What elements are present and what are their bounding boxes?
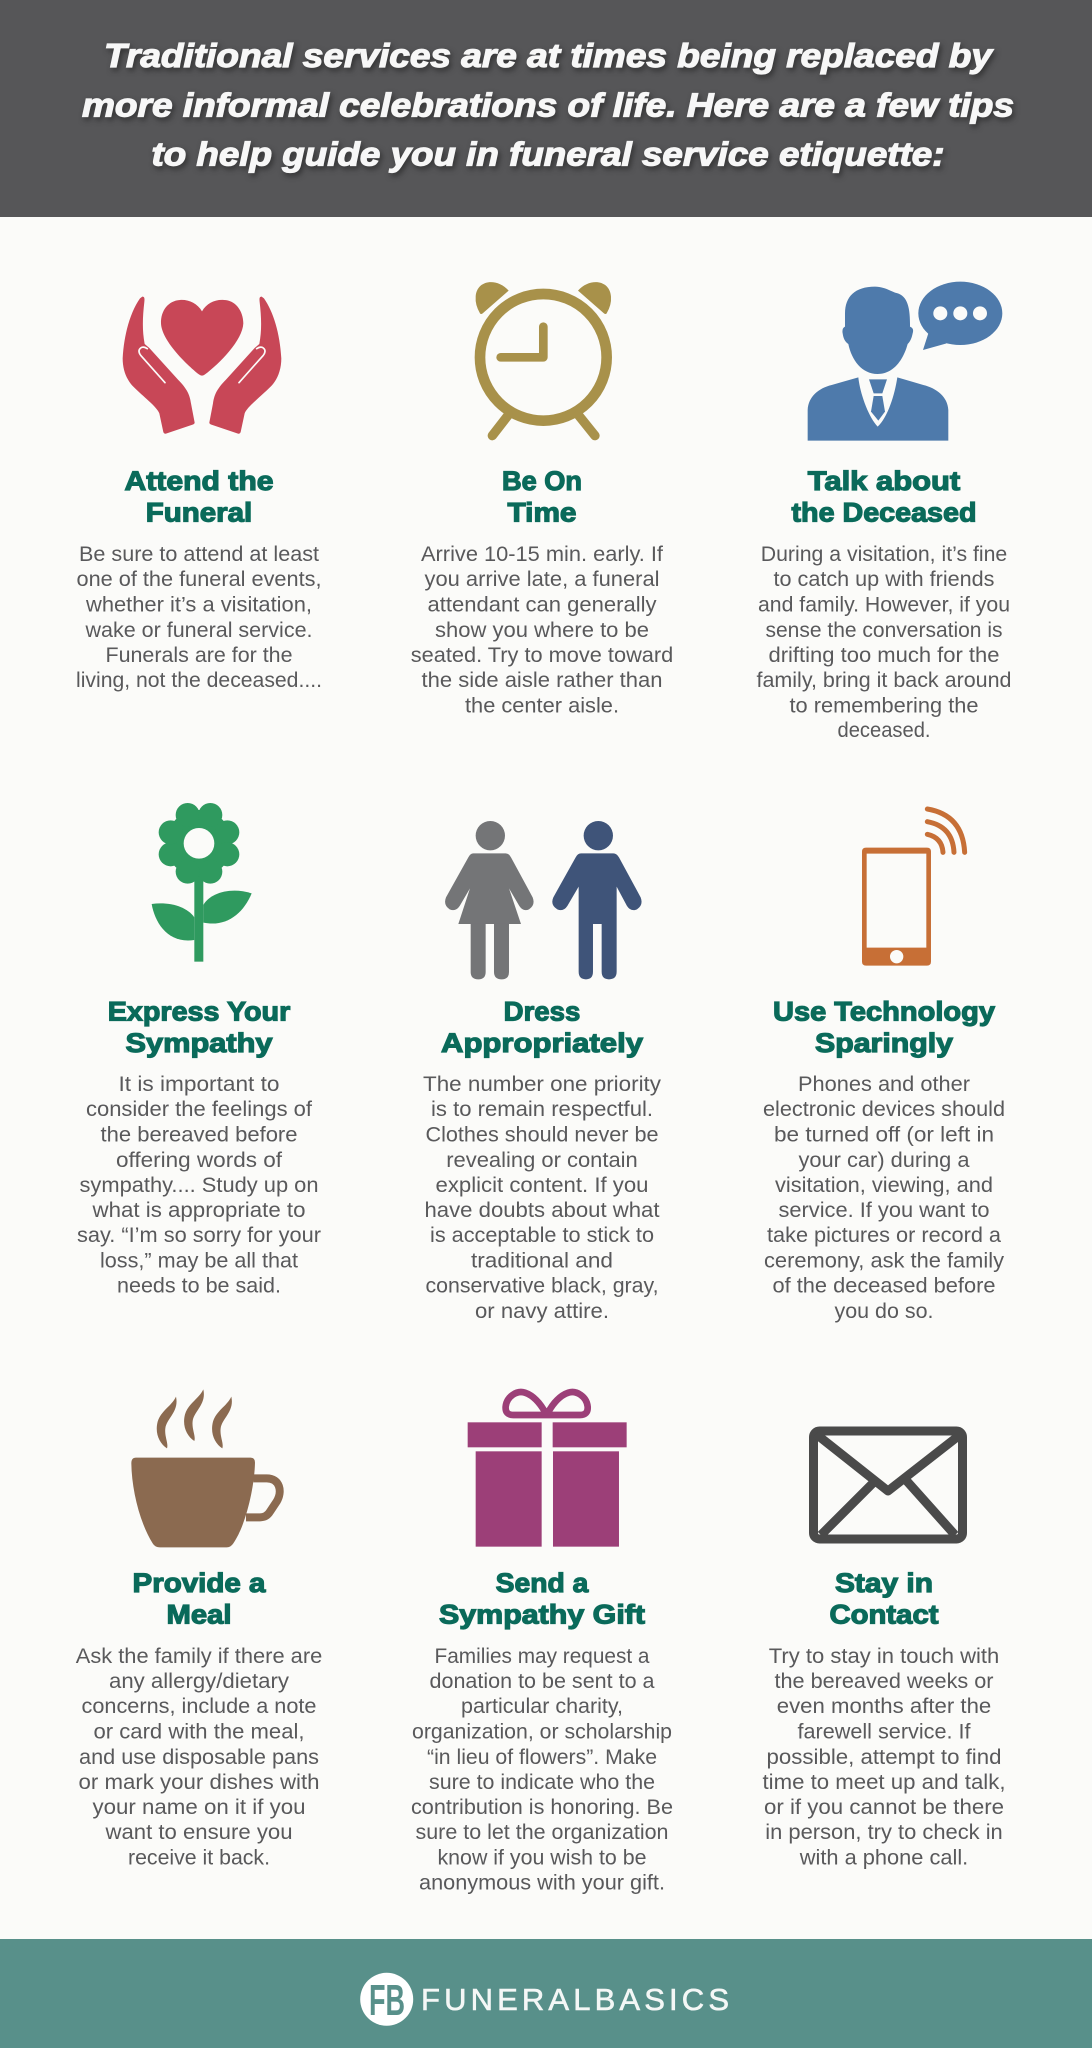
text: dress appropriately: Clothes should never be <box>426 1122 658 1146</box>
text: attend the funeral: wake or funeral service. <box>85 618 312 642</box>
text: express your sympathy: loss,” may be all that <box>100 1248 298 1272</box>
title <box>82 37 1014 172</box>
text: dress appropriately <box>423 1072 661 1323</box>
text: express your sympathy: what is appropriate to <box>91 1198 306 1222</box>
heading: provide a meal: Provide a <box>132 1568 267 1598</box>
text: talk about the deceased: During a visitation, it’s fine <box>761 542 1007 566</box>
text: express your sympathy: needs to be said. <box>117 1274 281 1298</box>
panel: use technology sparingly <box>763 809 1005 1323</box>
heading: dress appropriately: Appropriately <box>441 1028 643 1058</box>
text: use technology sparingly: take pictures or record a <box>767 1223 1001 1247</box>
text: attend the funeral: living, not the deceased.... <box>76 668 322 692</box>
text: stay in contact: or if you cannot be there <box>764 1795 1004 1819</box>
text: express your sympathy: the bereaved before <box>100 1122 298 1146</box>
icon: gift box <box>468 1392 627 1547</box>
text: express your sympathy: consider the feelings of <box>86 1097 312 1121</box>
panel: attend the funeral <box>76 297 322 692</box>
text: be on time: Arrive 10-15 min. early. If <box>421 542 663 566</box>
text: send a sympathy gift: “in lieu of flowers”. Make <box>427 1745 657 1769</box>
text: attend the funeral: one of the funeral events, <box>76 567 322 591</box>
panel: stay in contact <box>762 1431 1006 1870</box>
text: express your sympathy: It is important to <box>118 1072 280 1096</box>
text: be on time: seated. Try to move toward <box>411 643 673 667</box>
text: provide a meal: your name on it if you <box>92 1795 306 1819</box>
text: express your sympathy: sympathy.... Study up on <box>80 1173 318 1197</box>
heading: talk about the deceased: Talk about <box>808 466 960 496</box>
text: use technology sparingly: service. If you want to <box>778 1198 990 1222</box>
heading: attend the funeral: Funeral <box>146 498 252 528</box>
heading: attend the funeral <box>124 466 274 528</box>
text: send a sympathy gift: organization, or scholarship <box>412 1720 672 1744</box>
heading: talk about the deceased <box>792 466 976 528</box>
text: talk about the deceased: and family. However, if you <box>758 592 1010 616</box>
text: be on time: show you where to be <box>435 618 649 642</box>
text: provide a meal: Ask the family if there are <box>76 1644 322 1668</box>
icon: woman and man figures <box>445 821 642 979</box>
heading: express your sympathy <box>108 996 291 1058</box>
text: be on time: the center aisle. <box>465 694 619 718</box>
panel: provide a meal <box>76 1389 322 1870</box>
text: send a sympathy gift: particular charity, <box>461 1694 623 1718</box>
text: dress appropriately: have doubts about what <box>424 1198 660 1222</box>
panel: be on time <box>411 282 673 718</box>
heading: be on time: Be On <box>502 466 582 496</box>
text: talk about the deceased: to remembering the <box>790 694 978 718</box>
text: provide a meal: or card with the meal, <box>94 1720 304 1744</box>
text: send a sympathy gift: contribution is honoring. Be <box>411 1795 673 1819</box>
text: use technology sparingly: you do so. <box>834 1299 934 1323</box>
heading: express your sympathy: Express Your <box>108 996 291 1026</box>
text: send a sympathy gift: Families may request a <box>434 1644 650 1668</box>
header banner <box>0 0 1092 217</box>
text: talk about the deceased: sense the conversation is <box>766 618 1002 642</box>
heading: stay in contact: Contact <box>830 1600 939 1630</box>
heading: use technology sparingly: Use Technology <box>773 996 995 1026</box>
text: send a sympathy gift: anonymous with your gift. <box>419 1870 665 1894</box>
text: dress appropriately: or navy attire. <box>475 1299 609 1323</box>
text: dress appropriately: explicit content. If you <box>436 1173 648 1197</box>
text: dress appropriately: revealing or contain <box>446 1148 638 1172</box>
text: attend the funeral: Funerals are for the <box>106 643 292 667</box>
heading: stay in contact: Stay in <box>835 1568 933 1598</box>
text: dress appropriately: is to remain respectful. <box>431 1097 653 1121</box>
text: stay in contact: possible, attempt to find <box>766 1745 1002 1769</box>
text: dress appropriately: traditional and <box>471 1248 613 1272</box>
text: talk about the deceased: to catch up with friends <box>774 567 994 591</box>
title: Traditional services are at times being replaced by <box>104 37 994 74</box>
text: talk about the deceased: drifting too much for the <box>768 643 1000 667</box>
text: dress appropriately: The number one priority <box>423 1072 661 1096</box>
text: send a sympathy gift: sure to indicate who the <box>429 1770 655 1794</box>
heading: talk about the deceased: the Deceased <box>792 498 976 528</box>
text: stay in contact: even months after the <box>777 1694 991 1718</box>
text: provide a meal: receive it back. <box>128 1846 270 1870</box>
text: express your sympathy: say. “I’m so sorry for your <box>77 1223 321 1247</box>
panel: express your sympathy <box>77 803 321 1298</box>
text: talk about the deceased: family, bring it back around <box>756 668 1012 692</box>
text: send a sympathy gift: sure to let the organization <box>416 1820 668 1844</box>
text: be on time: attendant can generally <box>428 592 657 616</box>
text: be on time <box>411 542 673 718</box>
icon: man with speech bubble <box>808 282 1002 441</box>
heading: dress appropriately: Dress <box>504 996 580 1026</box>
text: stay in contact: time to meet up and talk, <box>762 1770 1006 1794</box>
icon: alarm clock <box>476 282 611 436</box>
panel: dress appropriately <box>423 821 661 1323</box>
heading: provide a meal <box>132 1568 267 1630</box>
heading: use technology sparingly <box>773 996 995 1058</box>
heading: be on time <box>502 466 582 528</box>
text: dress appropriately: conservative black, gray, <box>426 1274 658 1298</box>
icon: smartphone with signal <box>862 809 965 966</box>
text: stay in contact: farewell service. If <box>798 1720 971 1744</box>
heading: be on time: Time <box>508 498 576 528</box>
text: stay in contact: in person, try to check in <box>765 1820 1003 1844</box>
text: talk about the deceased <box>756 542 1012 742</box>
icon: coffee cup <box>131 1389 280 1547</box>
text: stay in contact: the bereaved weeks or <box>774 1669 994 1693</box>
text: send a sympathy gift: donation to be sent to a <box>430 1669 655 1693</box>
text: talk about the deceased: deceased. <box>838 718 930 742</box>
text: stay in contact: Try to stay in touch with <box>769 1644 999 1668</box>
text: attend the funeral: whether it’s a visitation, <box>85 592 312 616</box>
text: be on time: the side aisle rather than <box>422 668 662 692</box>
heading: provide a meal: Meal <box>166 1600 232 1630</box>
text: provide a meal: or mark your dishes with <box>78 1770 320 1794</box>
heading: dress appropriately <box>441 996 643 1058</box>
text: dress appropriately: is acceptable to stick to <box>430 1223 654 1247</box>
text: provide a meal: and use disposable pans <box>79 1745 319 1769</box>
text: use technology sparingly <box>763 1072 1005 1323</box>
text: attend the funeral: Be sure to attend at least <box>79 542 319 566</box>
text: use technology sparingly: ceremony, ask the family <box>764 1248 1004 1272</box>
text: use technology sparingly: electronic devices should <box>763 1097 1005 1121</box>
text: provide a meal: concerns, include a note <box>82 1694 316 1718</box>
text: send a sympathy gift <box>411 1644 673 1894</box>
heading: express your sympathy: Sympathy <box>126 1028 272 1058</box>
text: provide a meal: any allergy/dietary <box>109 1669 289 1693</box>
text: send a sympathy gift: know if you wish to be <box>438 1846 646 1870</box>
icon: hands holding heart <box>123 297 281 434</box>
text: express your sympathy: offering words of <box>116 1148 282 1172</box>
text: use technology sparingly: Phones and other <box>798 1072 970 1096</box>
heading: send a sympathy gift: Sympathy Gift <box>439 1600 645 1630</box>
text: attend the funeral <box>76 542 322 692</box>
title: more informal celebrations of life. Here are a few tips <box>82 86 1014 124</box>
text: be on time: you arrive late, a funeral <box>424 567 660 591</box>
heading: send a sympathy gift <box>439 1568 645 1630</box>
text: provide a meal <box>76 1644 322 1870</box>
text: express your sympathy <box>77 1072 321 1298</box>
heading: attend the funeral: Attend the <box>124 466 274 496</box>
heading: use technology sparingly: Sparingly <box>815 1028 953 1058</box>
text: use technology sparingly: visitation, viewing, and <box>775 1173 993 1197</box>
panel: send a sympathy gift <box>411 1392 673 1894</box>
logo: FB circle <box>360 1973 413 2026</box>
logo: FB circle: FB <box>369 1976 405 2025</box>
icon: flower <box>152 803 252 962</box>
text: use technology sparingly: of the deceased before <box>772 1274 996 1298</box>
logo: wordmark: FUNERALBASICS <box>421 1982 729 2017</box>
text: stay in contact: with a phone call. <box>799 1846 968 1870</box>
text: use technology sparingly: be turned off (or left in <box>774 1122 994 1146</box>
icon: envelope <box>814 1431 962 1539</box>
footer banner <box>0 1939 1092 2048</box>
text: use technology sparingly: your car) during a <box>798 1148 970 1172</box>
text: provide a meal: want to ensure you <box>104 1820 292 1844</box>
heading: send a sympathy gift: Send a <box>496 1568 589 1598</box>
title: to help guide you in funeral service etiquette: <box>152 136 945 172</box>
heading: stay in contact <box>830 1568 939 1630</box>
panel: talk about the deceased <box>756 282 1012 742</box>
text: stay in contact <box>762 1644 1006 1870</box>
